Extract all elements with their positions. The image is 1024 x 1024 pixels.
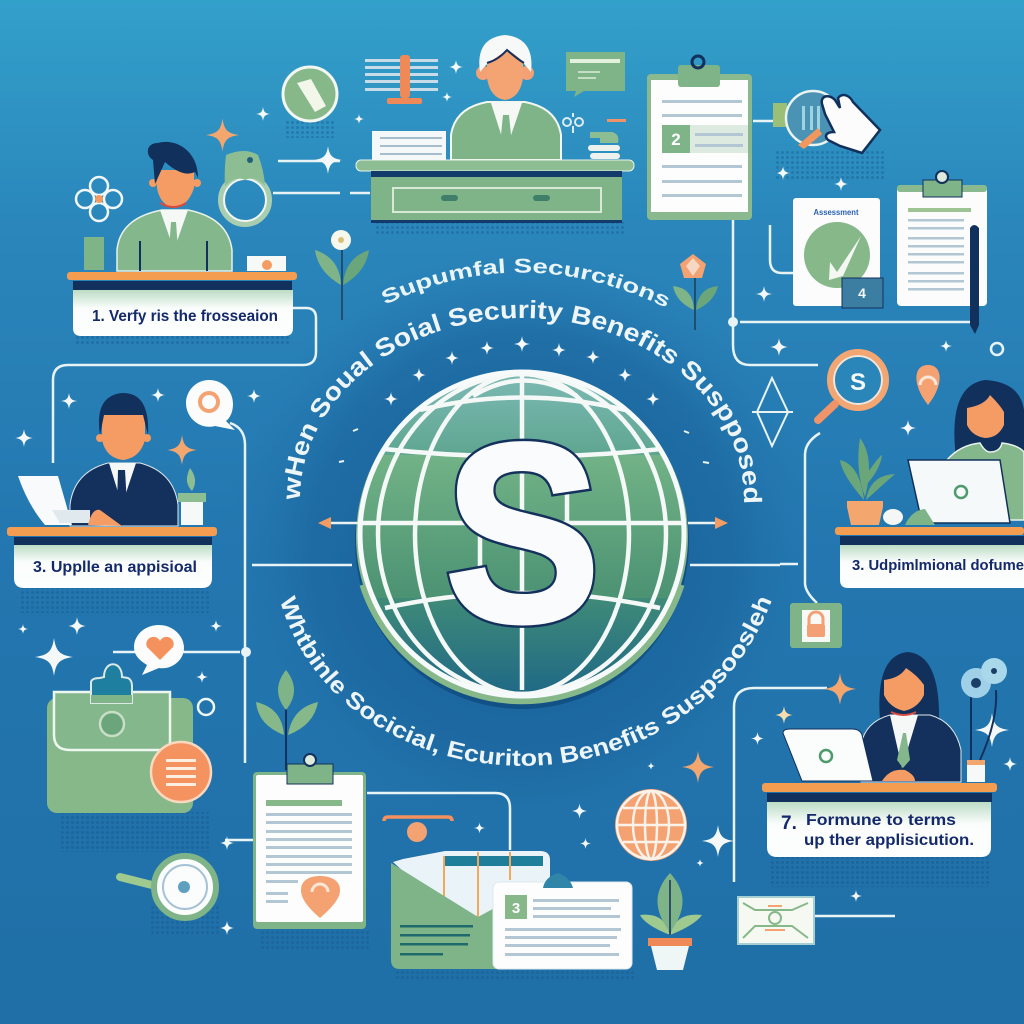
- step 3 label left: [14, 545, 212, 588]
- step 1 label: [73, 290, 293, 336]
- cream sparkle: [775, 706, 793, 724]
- double arrow: [318, 517, 728, 529]
- step 3 label right: 3. Udpimlmional dofume: [852, 557, 1024, 574]
- subtitle: bottom arc: Whtbinle Socicial, Ecuriton Benefits Suspsoosleh: [281, 594, 772, 766]
- ring node: [991, 343, 1003, 355]
- step 3 label left: 3. Upplle an appisioal: [33, 559, 197, 576]
- lower right figure: [762, 652, 1007, 802]
- clipboard panel 2: 2: [671, 130, 681, 149]
- folder with card: [391, 851, 632, 969]
- step 7 label: Formune to terms: [806, 812, 956, 829]
- lock tag: [790, 603, 842, 648]
- clipboard panel 2: [647, 56, 752, 220]
- icon: speech bubble: [566, 52, 625, 97]
- top reception desk figure: [356, 35, 634, 223]
- orange sparkles: [167, 118, 856, 783]
- speech bubble coin: [186, 380, 235, 430]
- arc tick marks: [339, 429, 709, 463]
- bottom right plant pot: [640, 873, 702, 970]
- clipboard bottom: [253, 754, 366, 929]
- briefcase icon: [47, 664, 211, 813]
- step 7 label: 7.: [781, 813, 797, 834]
- left top figure at desk: [67, 142, 297, 290]
- banknote: [738, 897, 814, 944]
- magnifier: S: [850, 369, 866, 396]
- small orange hanger icon: [384, 817, 452, 842]
- icon: knot cluster: [563, 113, 583, 133]
- right plant: [673, 254, 718, 330]
- icon: green circle tag: [283, 67, 337, 121]
- central globe: [350, 370, 700, 709]
- orange globe icon: [615, 789, 687, 861]
- halftone shadows: [20, 120, 990, 980]
- bottom plant: [256, 670, 318, 770]
- assessment document: Assessment: [814, 208, 859, 217]
- orange dash: [607, 119, 626, 122]
- magnifier left bottom: [120, 856, 216, 918]
- title: arc main: wHen Soual Soial Security Benefits Suspposed: [284, 300, 762, 502]
- magnifier: [818, 352, 886, 420]
- connector lines: [53, 121, 970, 916]
- letter S highlight: S: [444, 391, 601, 675]
- step 3 label right: [840, 545, 1024, 588]
- connector nodes: [241, 317, 738, 657]
- clipboard panel right: [897, 171, 987, 334]
- left middle figure: [7, 393, 217, 545]
- small ring icon: [198, 699, 214, 715]
- left plant: [315, 230, 369, 320]
- letter S: S: [444, 391, 601, 675]
- title: supplemental: Supumfal Securctions: [382, 258, 668, 306]
- assessment document: 4: [858, 285, 866, 301]
- step 7 label: up ther applisicution.: [804, 832, 974, 849]
- icon: stamp with lines: [365, 55, 438, 104]
- right figure with laptop: [835, 380, 1024, 545]
- location pin: [916, 365, 940, 405]
- icon: hand on circle: [773, 91, 880, 153]
- step 1 label: 1. Verfy ris the frosseaion: [92, 308, 278, 325]
- icon: clover outline: [76, 177, 122, 221]
- folder with card: 3: [512, 900, 520, 917]
- heart bubble: [134, 625, 184, 675]
- step 7 label: [767, 802, 991, 857]
- assessment document: [793, 198, 883, 308]
- icon: ring with pendant: [221, 151, 269, 224]
- diamond compass: [752, 378, 793, 446]
